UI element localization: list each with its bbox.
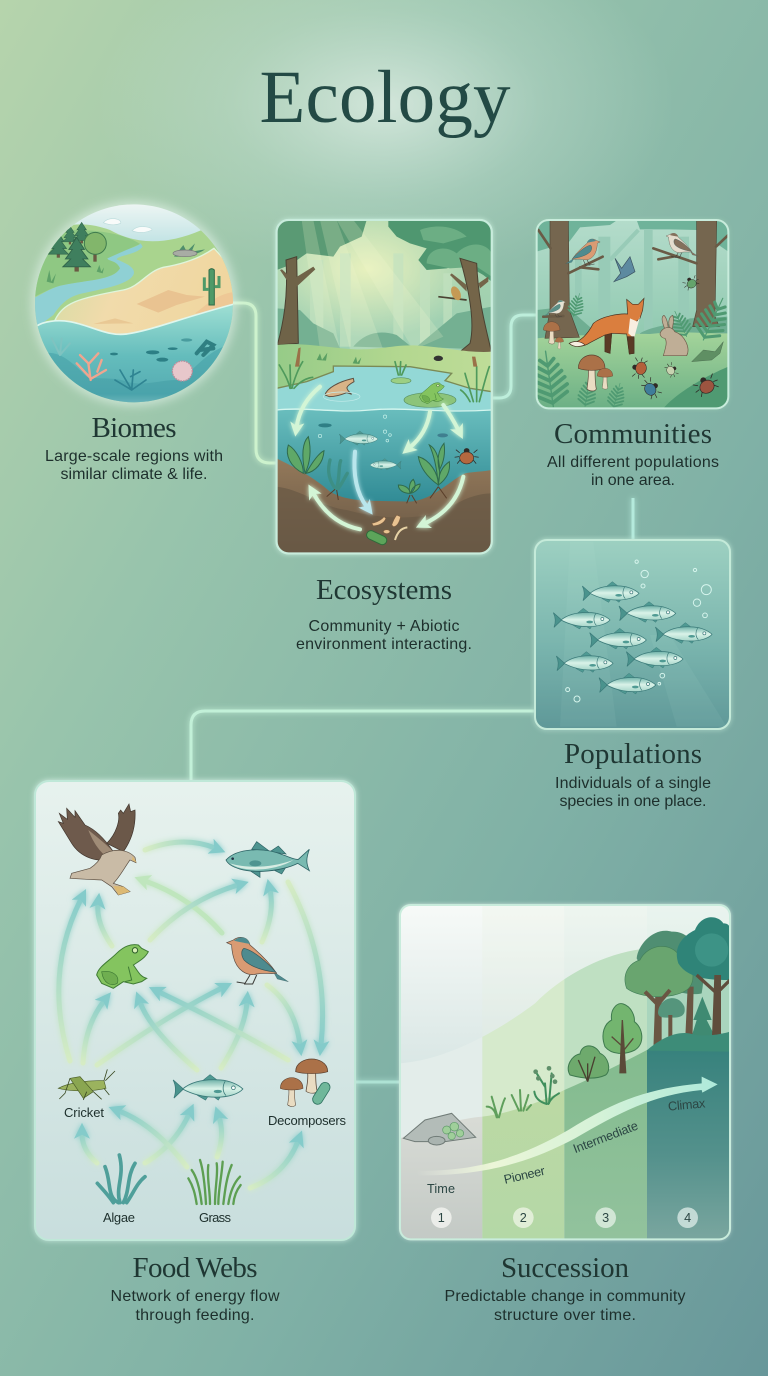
meadow: [278, 344, 491, 391]
canopy: [277, 220, 367, 270]
corals and fish: [77, 353, 106, 380]
heading: populations: Populations: [564, 738, 702, 770]
text: ecosystems description: environment interacting.: [296, 636, 472, 653]
otter: [325, 378, 354, 397]
rabbit: [660, 315, 688, 356]
trees: [545, 220, 579, 338]
water beetle: [455, 448, 479, 464]
connector: communities to populations: [632, 498, 634, 541]
text: food webs description: [110, 1288, 280, 1324]
text: ecosystems description: [296, 618, 472, 653]
back hill: [400, 943, 730, 1143]
text: biomes description: [45, 448, 223, 483]
birds: [566, 239, 600, 265]
icon: bass fish: [226, 842, 309, 877]
climax forest: [625, 917, 731, 1052]
text: communities description: [547, 454, 719, 489]
icon: silver fish: [173, 1075, 243, 1100]
text: succession description: structure over time.: [494, 1307, 636, 1324]
background trunks: [310, 253, 452, 347]
underwater plants: [287, 437, 450, 493]
panel: succession: Intermediate: [571, 1119, 640, 1156]
label: algae: Algae: [103, 1210, 135, 1225]
cactus: [209, 269, 214, 305]
text: ecosystems description: Community + Abiotic: [308, 618, 460, 635]
text: biomes description: similar climate & life.: [60, 466, 208, 483]
bubbles: [566, 560, 711, 702]
panel: ecosystems scene: [277, 220, 492, 553]
connector: ecosystems to communities: [492, 315, 537, 398]
connector: food webs to succession: [355, 1080, 400, 1084]
ecosystem cycle arrows: [297, 387, 463, 529]
stage labels: Time: [427, 1182, 455, 1196]
heading: food webs: Food Webs: [132, 1252, 258, 1284]
stage number badges: 3: [602, 1211, 609, 1225]
mushrooms: [543, 322, 560, 344]
time arrow: [417, 1077, 718, 1175]
tree trunks: [277, 257, 298, 345]
label: cricket: Cricket: [64, 1105, 104, 1120]
text: populations description: species in one place.: [560, 793, 706, 810]
heading: succession: Succession: [501, 1252, 630, 1284]
sun rays: [302, 220, 443, 350]
label: decomposers: Decomposers: [268, 1113, 346, 1128]
pioneer plants: [487, 1073, 559, 1117]
pine trees: [48, 236, 68, 258]
underwater: [277, 410, 492, 510]
heading: biomes: Biomes: [92, 412, 176, 444]
text: communities description: in one area.: [591, 472, 675, 489]
panel: biomes globe: [31, 201, 240, 410]
lily pads and frog: [391, 378, 411, 384]
panel: succession: Pioneer: [503, 1164, 546, 1187]
stage number badges: 4: [684, 1211, 691, 1225]
text: communities description: All different populations: [547, 454, 719, 471]
connector: biomes to ecosystems: [232, 303, 277, 463]
fox: [569, 298, 644, 354]
icon: cricket: [58, 1069, 115, 1100]
heading: ecosystems: Ecosystems: [316, 574, 452, 606]
ground: [537, 332, 728, 408]
text: food webs description: Network of energy flow: [110, 1288, 280, 1305]
text: succession description: [444, 1288, 686, 1324]
panel: communities scene: [529, 220, 735, 410]
front ground columns: [400, 1030, 730, 1240]
text: biomes description: Large-scale regions with: [45, 448, 223, 465]
icon: bird: [227, 937, 288, 984]
fish: [339, 431, 378, 445]
ferns: [568, 293, 584, 317]
stage number badges: 2: [520, 1211, 527, 1225]
soil: [277, 458, 492, 553]
shrub: [568, 1046, 609, 1078]
stage number badges: 1: [438, 1211, 445, 1225]
heading: communities: Communities: [554, 418, 712, 450]
beetles: [632, 357, 648, 379]
connector: populations to food webs: [191, 711, 536, 781]
decomposers: [372, 515, 401, 534]
text: succession description: Predictable change in community: [444, 1288, 686, 1305]
pond surface: [277, 366, 492, 413]
fish school: [553, 582, 712, 694]
title: Ecology: [260, 56, 511, 139]
panel: succession: [400, 905, 731, 1240]
icon: decomposers: [280, 1059, 332, 1106]
icon: frog: [97, 945, 148, 988]
young tree: [603, 1004, 642, 1053]
text: populations description: Individuals of a single: [555, 775, 711, 792]
rock with lichen: [403, 1113, 476, 1142]
clouds: [103, 219, 152, 233]
stage number badges: [431, 1207, 698, 1228]
panel: populations school of fish: [535, 540, 730, 729]
reeds: [279, 362, 489, 402]
icon: algae: [97, 1155, 145, 1203]
text: food webs description: through feeding.: [136, 1307, 254, 1324]
label: grass: Grass: [199, 1210, 232, 1225]
panel: food web: [35, 781, 355, 1240]
icon: eagle: [58, 804, 137, 895]
panel: succession: Climax: [667, 1096, 707, 1114]
food web arrows: [59, 842, 323, 1188]
icon: grass: [188, 1160, 241, 1204]
text: populations description: [555, 775, 711, 810]
